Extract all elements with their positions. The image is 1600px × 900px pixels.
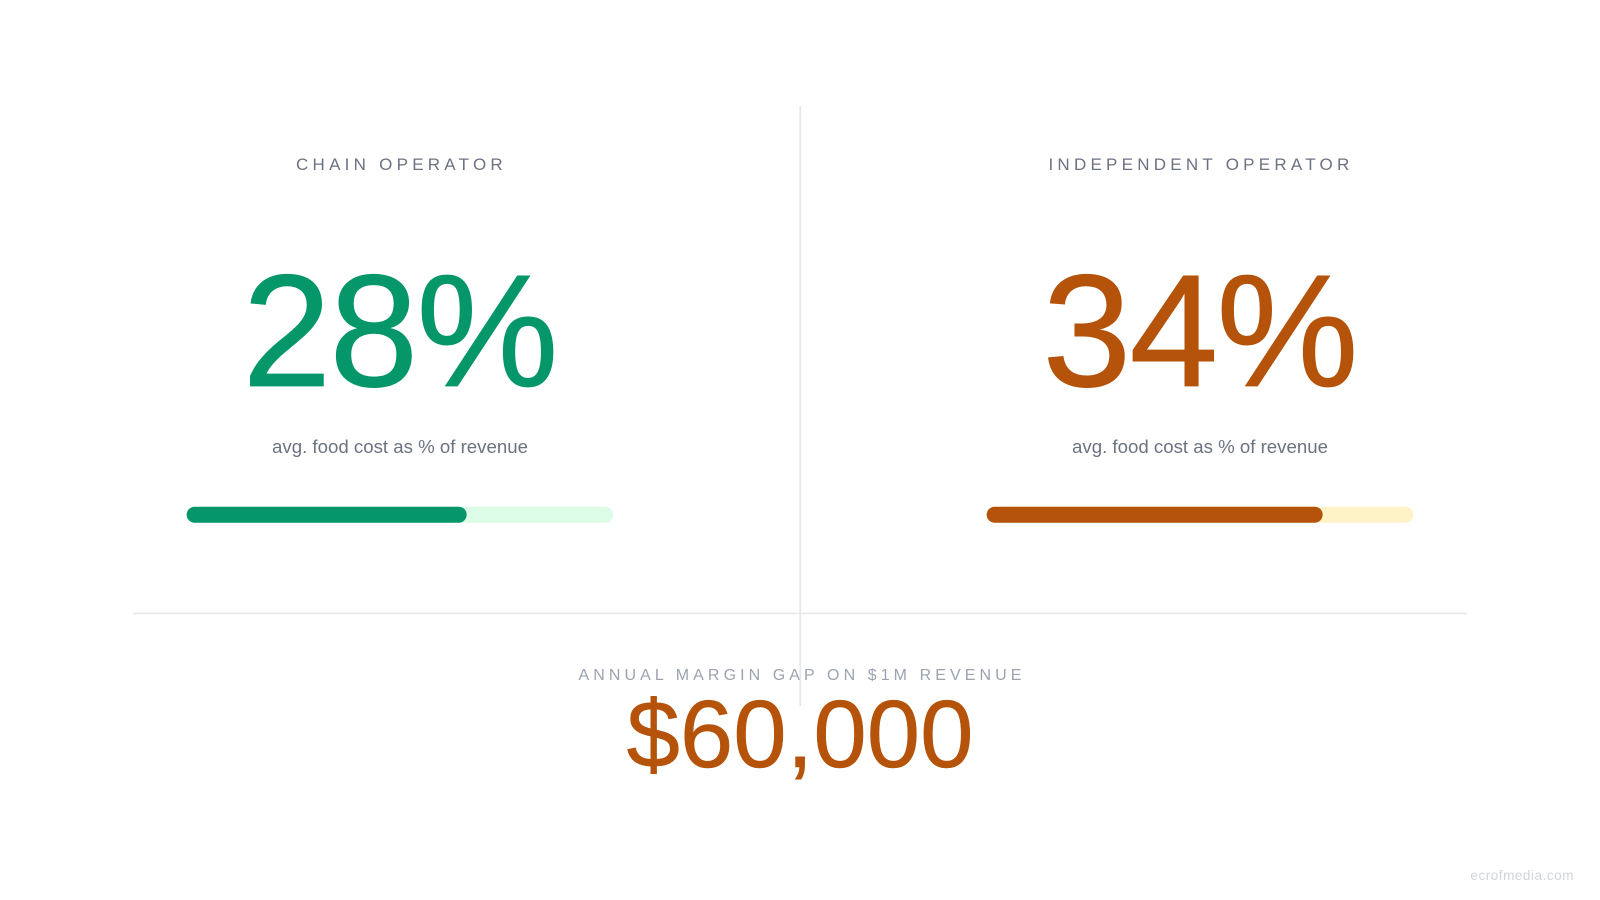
heading: independent operator: INDEPENDENT OPERATOR — [1048, 155, 1354, 174]
panel: independent operator — [987, 155, 1413, 523]
stat: $60,000: $60,000 — [626, 681, 974, 788]
progress bar: independent — [987, 507, 1413, 523]
stat: 28%: 28% — [242, 241, 557, 420]
panel: chain operator — [187, 155, 613, 523]
caption: chain food cost: avg. food cost as % of revenue — [272, 436, 528, 457]
caption: independent food cost: avg. food cost as % of revenue — [1072, 436, 1328, 457]
footer: source credit: ecrofmedia.com — [1470, 868, 1574, 883]
label: annual margin gap: ANNUAL MARGIN GAP ON $1M REVENUE — [578, 667, 1026, 684]
heading: chain operator: CHAIN OPERATOR — [296, 155, 507, 174]
progress bar: chain — [187, 507, 613, 523]
stat: 34%: 34% — [1042, 241, 1357, 420]
panel: annual margin gap — [578, 667, 1026, 788]
